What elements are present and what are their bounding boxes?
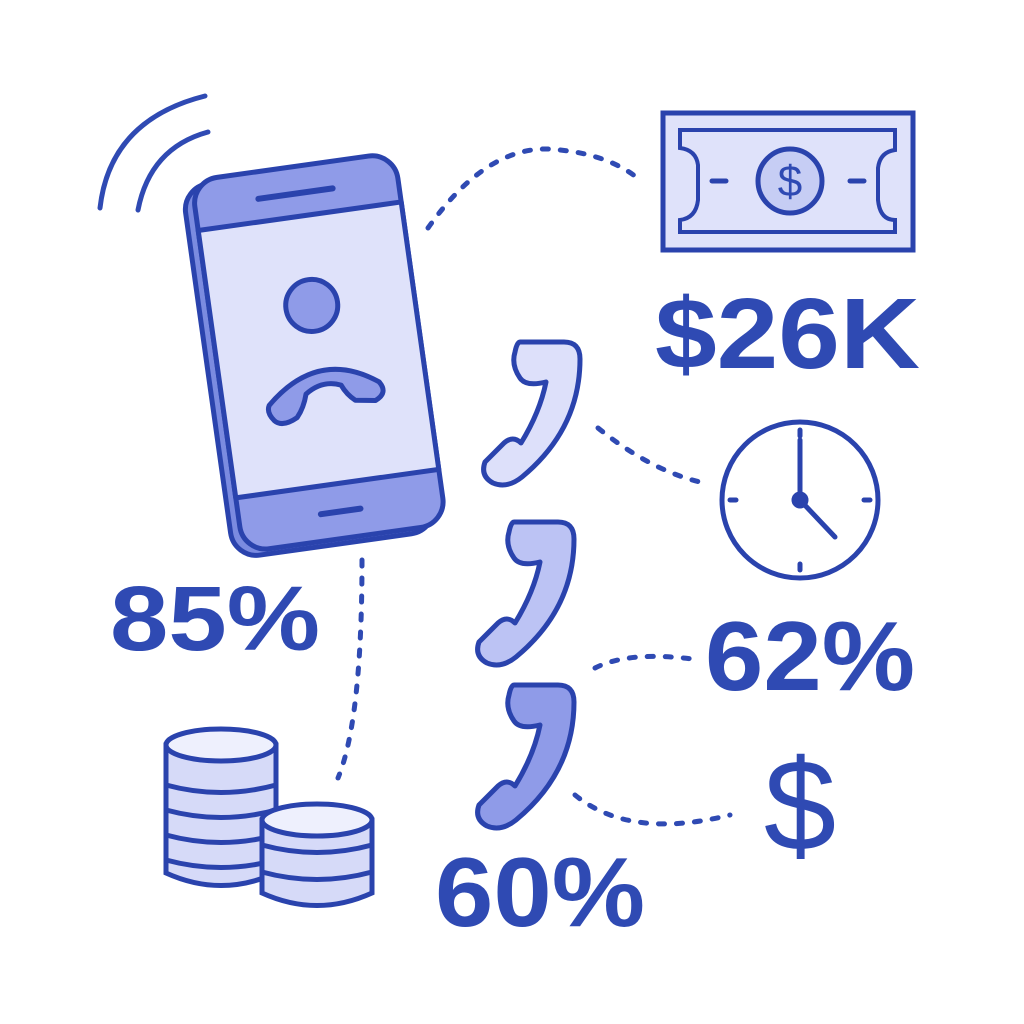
icon: dollar sign: $: [764, 732, 836, 878]
text: bill dollar sign: $: [778, 157, 802, 206]
icon: clock: [722, 422, 878, 578]
icon: signal waves: [100, 96, 208, 210]
stat: 60%: 60%: [435, 837, 645, 947]
icon: phone with declined call: [181, 152, 447, 559]
icon: dollar bill: [663, 113, 913, 250]
stat: 85%: 85%: [110, 568, 320, 670]
icon: handsets: [478, 342, 580, 828]
connector dashes: [338, 149, 730, 824]
icon: coin stacks: [166, 729, 372, 906]
stat: $26K: $26K: [655, 278, 920, 390]
stat: 62%: 62%: [705, 601, 915, 711]
